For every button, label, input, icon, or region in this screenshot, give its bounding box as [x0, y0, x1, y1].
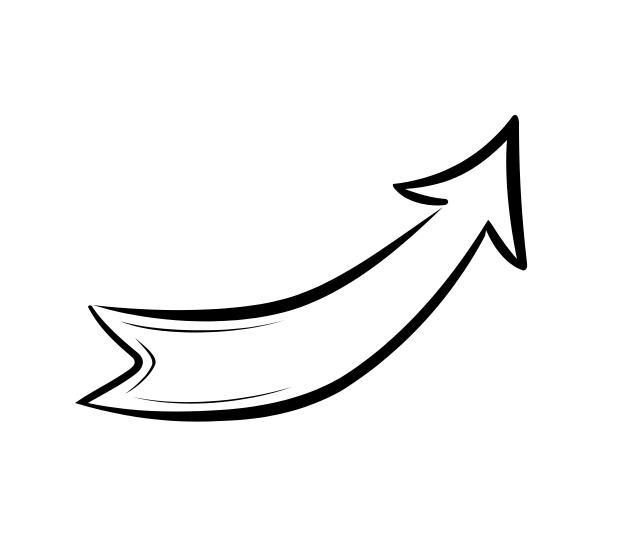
arrow shaft: upper edge stroke [93, 207, 443, 321]
arrow head outline [393, 115, 527, 270]
highlight: tail inner curve [125, 338, 156, 394]
arrow tail notch [75, 305, 143, 403]
highlight: lower inner line [133, 387, 292, 404]
arrow shaft: lower edge stroke [75, 220, 488, 422]
highlight: upper inner line [120, 320, 285, 333]
